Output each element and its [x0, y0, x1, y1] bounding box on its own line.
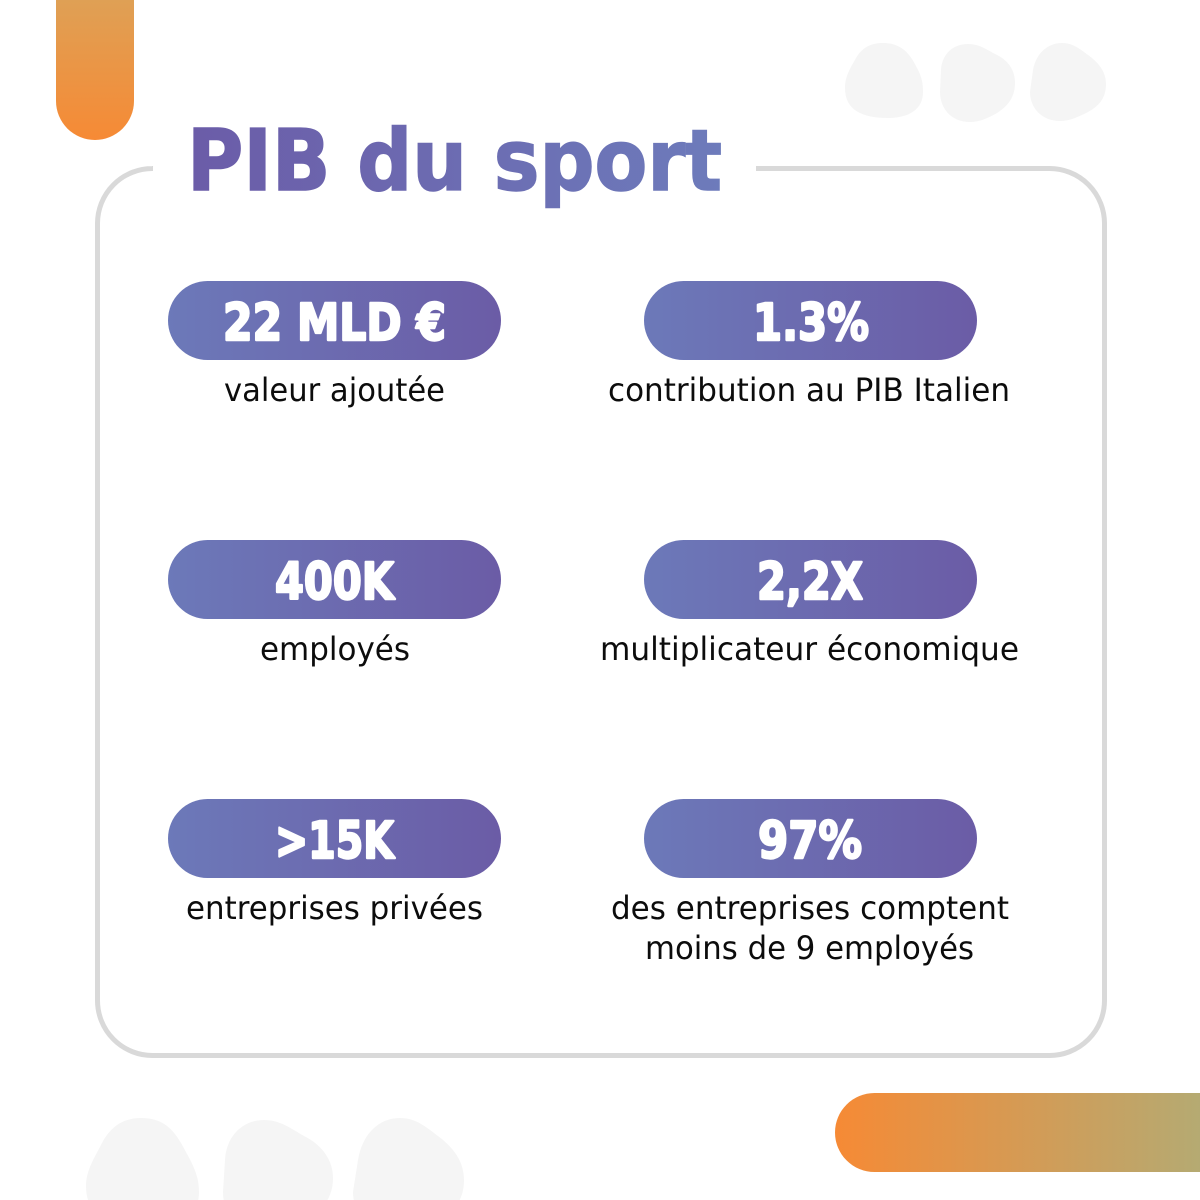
stat: entreprises privées: entreprises privées [186, 889, 483, 927]
stat: valeur ajoutée: valeur ajoutée [224, 371, 445, 409]
stat: employés [168, 540, 501, 668]
orange bar: top left [56, 0, 134, 140]
decorative blobs: bottom left [86, 1118, 464, 1200]
orange bar: bottom right [835, 1093, 1200, 1172]
stat: employés: employés [260, 630, 410, 668]
stat: multiplicateur économique [600, 540, 1019, 668]
stat: contribution au PIB Italien: 1.3% [753, 294, 869, 353]
stat: multiplicateur économique: 2,2X [757, 553, 863, 612]
title: PIB du sport [187, 112, 722, 211]
stat: entreprises privées: >15K [275, 812, 396, 871]
stat: valeur ajoutée: 22 MLD € [223, 294, 446, 353]
stat: des entreprises comptent moins de 9 employés [611, 799, 1009, 967]
stat: des entreprises comptent moins de 9 employés: moins de 9 employés [645, 929, 974, 967]
decorative blobs: top right [845, 43, 1106, 122]
stat: contribution au PIB Italien: contribution au PIB Italien [608, 371, 1010, 409]
stat: des entreprises comptent moins de 9 employés: 97% [758, 812, 862, 871]
stat: des entreprises comptent moins de 9 employés: des entreprises comptent [611, 889, 1009, 927]
stat: employés: 400K [275, 553, 396, 612]
stat: entreprises privées [168, 799, 501, 927]
panel border [97, 168, 1105, 1056]
stat: multiplicateur économique: multiplicateur économique [600, 630, 1019, 668]
stat: contribution au PIB Italien [608, 281, 1010, 409]
stat: valeur ajoutée [168, 281, 501, 409]
